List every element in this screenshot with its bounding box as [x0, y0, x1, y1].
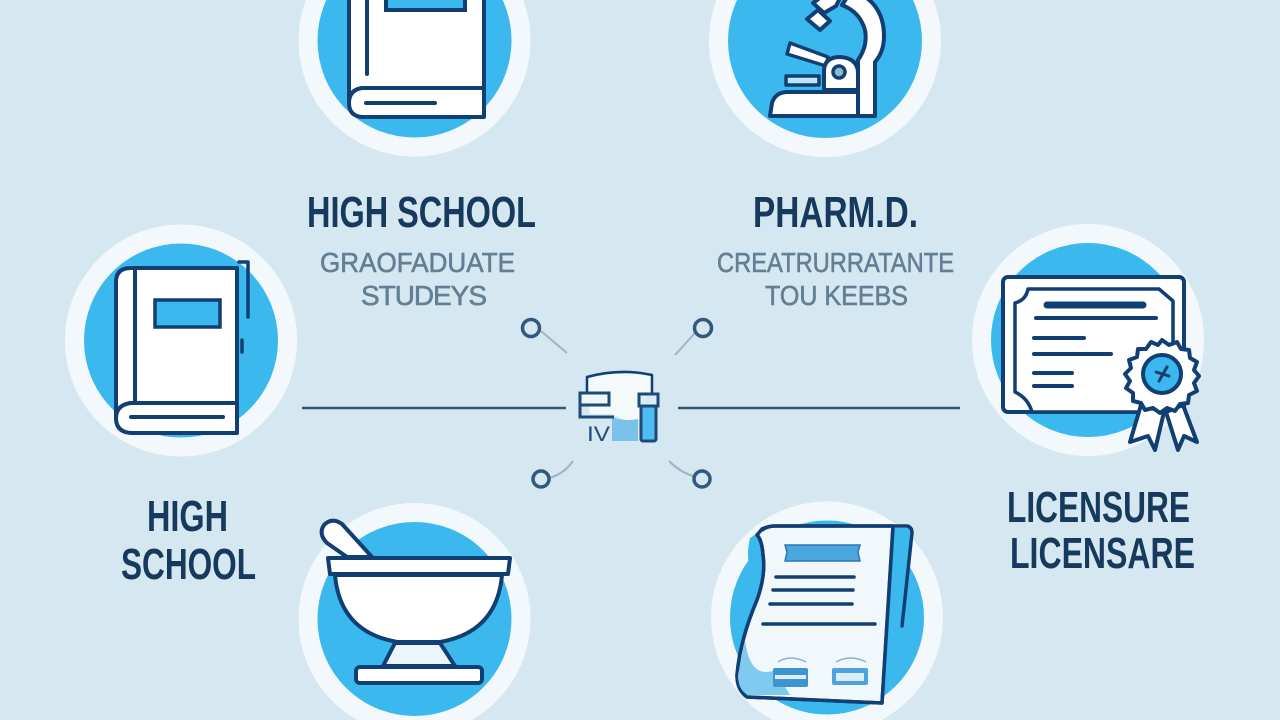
heading: high school (left) line 2: SCHOOL — [121, 540, 256, 589]
icon: central IV bag — [580, 372, 658, 446]
node: lower left — [533, 461, 573, 487]
hub connector: left line — [302, 407, 566, 409]
hub connector: right line — [678, 407, 960, 409]
icon: textbook (top left) — [308, 0, 521, 147]
heading: pharm.d.: PHARM.D. — [753, 188, 918, 237]
heading: high school: HIGH SCHOOL — [307, 188, 536, 237]
icon: mortar and pestle (bottom left) — [308, 512, 521, 720]
text: graduate studies line 2: STUDEYS — [361, 280, 487, 311]
heading: licensure line 1: LICENSURE — [1007, 483, 1190, 532]
icon: diploma document (bottom right) — [720, 511, 934, 720]
icon: notebook (left) — [74, 234, 288, 447]
icon: microscope (top right) — [718, 0, 932, 148]
icon: license certificate (right) — [982, 234, 1199, 450]
node: upper left — [522, 320, 567, 353]
heading: high school (left) line 1: HIGH — [147, 492, 228, 541]
text: graduate studies line 1: GRAOFADUATE — [320, 247, 515, 278]
icon: central IV bag: IV — [587, 423, 610, 446]
node: upper right — [675, 320, 712, 355]
text: pharm.d. subtitle line 2: TOU KEEBS — [765, 280, 908, 311]
text: pharm.d. subtitle line 1: CREATRURRATANTE — [717, 247, 954, 278]
node: lower right — [669, 461, 710, 487]
heading: licensure line 2: LICENSARE — [1010, 529, 1195, 578]
